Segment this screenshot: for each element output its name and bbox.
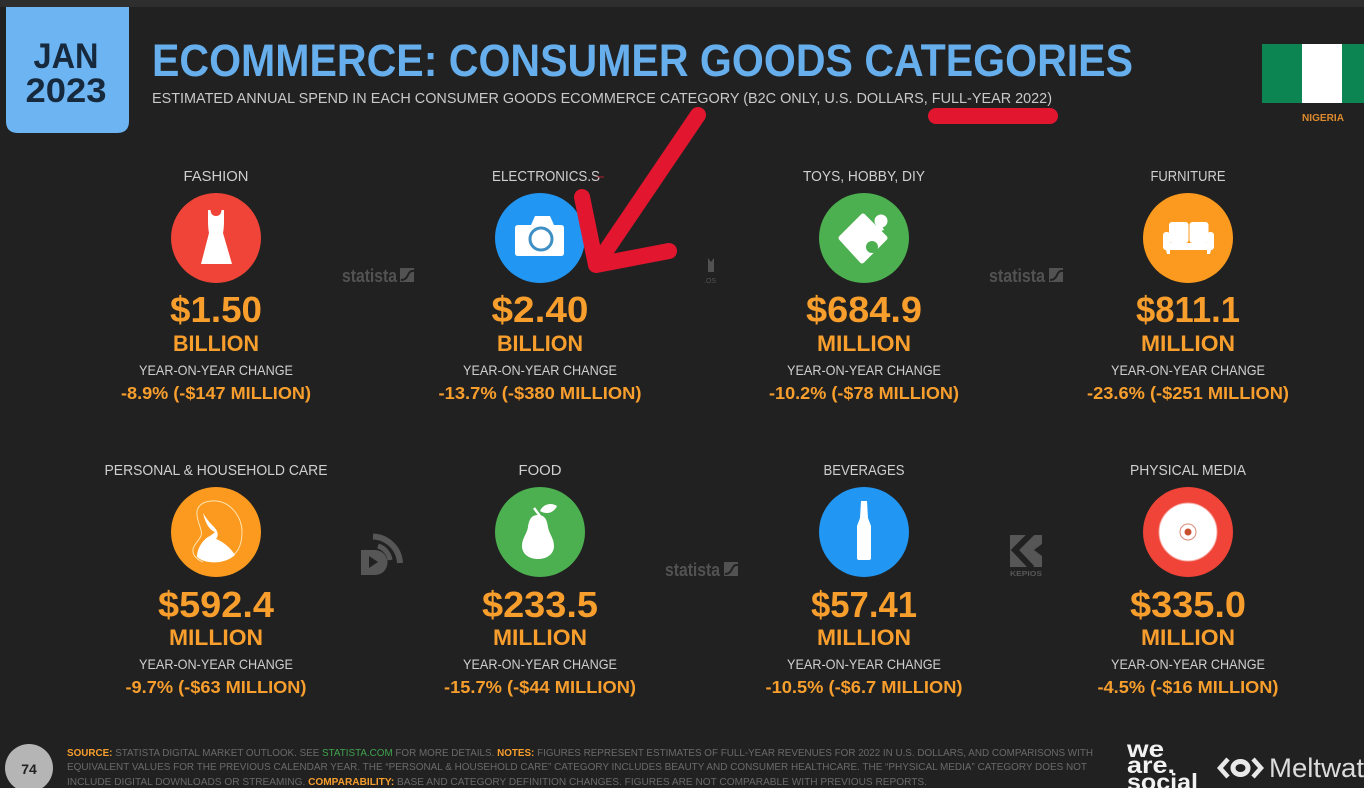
- panel: personal and household care: PERSONAL & HOUSEHOLD CARE: [104, 463, 328, 479]
- icon: woman silhouette: [171, 487, 261, 577]
- icon: disc: [1143, 487, 1233, 577]
- panel: beverages: MILLION: [817, 625, 911, 650]
- date badge: 2023: [26, 72, 106, 110]
- panel: physical media: [1098, 463, 1278, 697]
- panel: beverages: YEAR-ON-YEAR CHANGE: [787, 656, 941, 672]
- red ink speck: [597, 176, 604, 178]
- page number: [5, 744, 53, 788]
- watermark: Kepios: KEPIOS: [1010, 569, 1042, 578]
- panel: personal and household care: [104, 463, 328, 697]
- panel: electronics: -13.7% (-$380 MILLION): [438, 383, 642, 403]
- panel: food: -15.7% (-$44 MILLION): [444, 677, 636, 697]
- panel: toys, hobby, diy: MILLION: [817, 331, 911, 356]
- page number: 74: [21, 761, 37, 777]
- panel: personal and household care: MILLION: [169, 625, 263, 650]
- panel: electronics: ELECTRONICS.S: [492, 169, 600, 185]
- watermark: cropped logo: .OS: [704, 278, 716, 285]
- panel: food: MILLION: [493, 625, 587, 650]
- icon: bottle: [819, 487, 909, 577]
- panel: electronics: BILLION: [497, 331, 583, 356]
- panel: fashion: [121, 169, 311, 403]
- date badge: JAN: [34, 37, 98, 76]
- panel: toys, hobby, diy: -10.2% (-$78 MILLION): [769, 383, 959, 403]
- panel: physical media: PHYSICAL MEDIA: [1130, 463, 1246, 479]
- panel: beverages: [766, 463, 962, 697]
- panel: electronics: [438, 169, 642, 403]
- logo: Meltwater: Meltwat: [1269, 753, 1364, 783]
- panel: beverages: -10.5% (-$6.7 MILLION): [766, 677, 962, 697]
- panel: fashion: YEAR-ON-YEAR CHANGE: [139, 362, 293, 378]
- footnotes: [67, 747, 1093, 788]
- footnotes: EQUIVALENT VALUES FOR THE PREVIOUS CALENDAR YEAR. THE “PERSONAL & HOUSEHOLD CARE” CATEGORY INCLUDES BEAUTY AND CONSUMER HEALTHCARE. THE “PHYSICAL MEDIA” CATEGORY DOES NOT: [67, 761, 1088, 773]
- panel: personal and household care: YEAR-ON-YEAR CHANGE: [139, 656, 293, 672]
- panel: personal and household care: $592.4: [158, 584, 274, 625]
- panel: fashion: $1.50: [170, 289, 262, 330]
- panel: toys, hobby, diy: YEAR-ON-YEAR CHANGE: [787, 362, 941, 378]
- watermark: statista: statista: [989, 266, 1046, 286]
- panel: toys, hobby, diy: $684.9: [806, 289, 922, 330]
- flag: Nigeria: [1262, 44, 1364, 124]
- panel: physical media: MILLION: [1141, 625, 1235, 650]
- panel: furniture: FURNITURE: [1150, 169, 1226, 185]
- watermark: statista: statista: [342, 266, 398, 286]
- panel: furniture: $811.1: [1136, 289, 1240, 330]
- panel: physical media: $335.0: [1130, 584, 1246, 625]
- panel: furniture: YEAR-ON-YEAR CHANGE: [1111, 362, 1265, 378]
- panel: fashion: BILLION: [173, 331, 259, 356]
- icon: sofa: [1143, 193, 1233, 283]
- panel: furniture: -23.6% (-$251 MILLION): [1087, 383, 1289, 403]
- arrow annotation: [582, 115, 698, 265]
- logo: we are social: [1126, 736, 1198, 788]
- logo: Meltwater: [1220, 753, 1364, 783]
- watermark: datareportal: [361, 536, 400, 575]
- icon: camera: [495, 193, 585, 283]
- icon: puzzle piece: [819, 193, 909, 283]
- watermark: cropped logo: [704, 258, 716, 285]
- icon: pear: [495, 487, 585, 577]
- panel: electronics: YEAR-ON-YEAR CHANGE: [463, 362, 617, 378]
- title: ECOMMERCE: CONSUMER GOODS CATEGORIES: [152, 35, 1133, 86]
- watermark: statista: statista: [665, 560, 721, 580]
- panel: furniture: [1087, 169, 1289, 403]
- icon: dress: [171, 193, 261, 283]
- panel: personal and household care: -9.7% (-$63 MILLION): [126, 677, 306, 697]
- panel: fashion: -8.9% (-$147 MILLION): [121, 383, 311, 403]
- date badge: [6, 7, 129, 133]
- panel: fashion: FASHION: [184, 169, 248, 185]
- flag: Nigeria: NIGERIA: [1302, 113, 1344, 124]
- panel: food: FOOD: [518, 463, 562, 479]
- panel: physical media: -4.5% (-$16 MILLION): [1098, 677, 1278, 697]
- panel: food: YEAR-ON-YEAR CHANGE: [463, 656, 617, 672]
- panel: beverages: BEVERAGES: [824, 463, 904, 479]
- watermark: Kepios: [1010, 533, 1042, 578]
- panel: beverages: $57.41: [811, 584, 917, 625]
- logo: we are social: we: [1126, 736, 1164, 762]
- panel: food: [444, 463, 636, 697]
- panel: electronics: $2.40: [492, 289, 588, 330]
- panel: toys, hobby, diy: TOYS, HOBBY, DIY: [803, 169, 925, 185]
- logo: we are social: are.: [1127, 752, 1175, 778]
- panel: physical media: YEAR-ON-YEAR CHANGE: [1111, 656, 1265, 672]
- subtitle: ESTIMATED ANNUAL SPEND IN EACH CONSUMER GOODS ECOMMERCE CATEGORY (B2C ONLY, U.S. DOLLARS, FULL-YEAR 2022): [152, 90, 1052, 107]
- panel: furniture: MILLION: [1141, 331, 1235, 356]
- underline annotation: [936, 108, 1050, 124]
- panel: toys, hobby, diy: [769, 169, 959, 403]
- panel: food: $233.5: [482, 584, 598, 625]
- footnotes: SOURCE: STATISTA DIGITAL MARKET OUTLOOK. SEE STATISTA.COM FOR MORE DETAILS. NOTES: FIGURES REPRESENT ESTIMATES OF FULL-YEAR REVENUES FOR 2022 IN U.S. DOLLARS, AND COMPARISONS WITH: [67, 747, 1093, 759]
- footnotes: INCLUDE DIGITAL DOWNLOADS OR STREAMING. COMPARABILITY: BASE AND CATEGORY DEFINITION CHANGES. FIGURES ARE NOT COMPARABLE WITH PREVIOUS REPORTS.: [67, 776, 927, 788]
